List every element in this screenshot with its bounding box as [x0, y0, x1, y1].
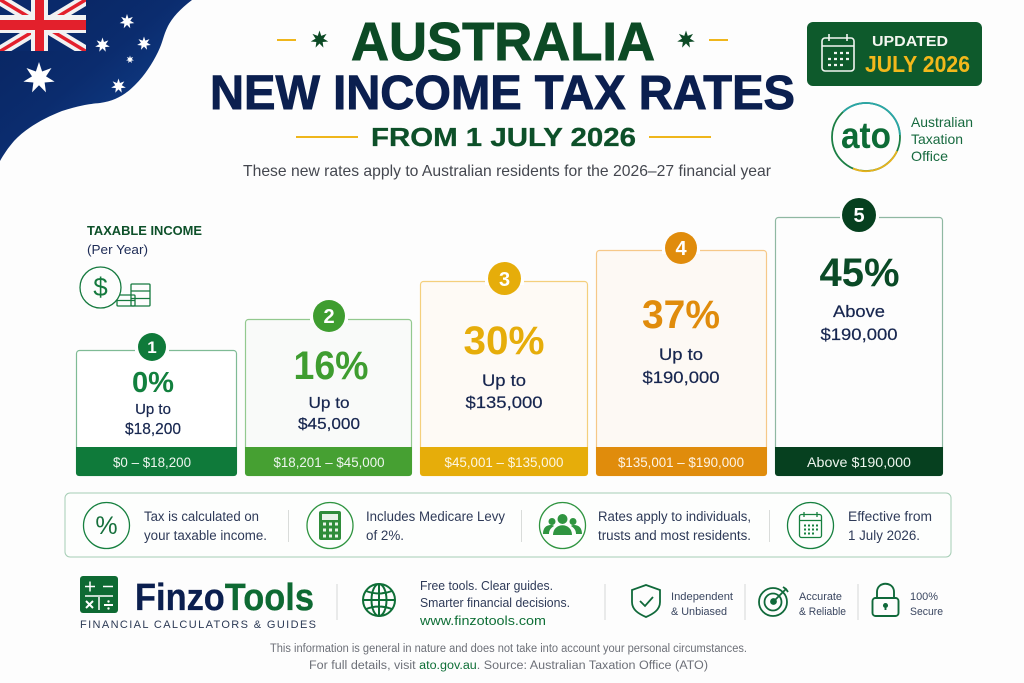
- icon: globe: [363, 584, 395, 616]
- promo text: Smarter financial decisions.: [420, 596, 570, 610]
- label: agency name: Office: [911, 148, 948, 164]
- threshold text: [125, 401, 181, 438]
- subtitle: These new rates apply to Australian residents for the 2026–27 financial year: [243, 163, 772, 180]
- label: agency name: [911, 114, 973, 164]
- badge text: Independent: [671, 591, 733, 603]
- disclaimer: This information is general in nature and does not take into account your personal circumstances.: [270, 643, 747, 655]
- number badge 1: [135, 333, 169, 361]
- note text: of 2%.: [366, 528, 404, 543]
- number badge 2: 2: [323, 306, 335, 328]
- number badge 2: [310, 300, 348, 332]
- badge text: & Reliable: [799, 606, 846, 618]
- note text: Rates apply to individuals,: [598, 509, 751, 524]
- note text: [144, 509, 267, 543]
- logo: FinzoTools: [80, 576, 316, 631]
- rate 16%: 16%: [294, 344, 368, 388]
- icon: Australian flag: [0, 0, 192, 161]
- panel: bracket 3: [420, 262, 588, 476]
- label: updated: UPDATED: [872, 33, 948, 50]
- range label: $45,001 – $135,000: [444, 454, 564, 470]
- number badge 5: [840, 198, 879, 232]
- threshold text: $190,000: [642, 368, 720, 387]
- number badge 5: 5: [853, 205, 865, 227]
- badge text: 100%: [910, 591, 938, 603]
- icon: shield: [632, 585, 660, 617]
- number badge 4: [662, 232, 700, 264]
- heading: new income tax rates: NEW INCOME TAX RATES: [210, 67, 795, 120]
- icon: calculator tile: [80, 576, 118, 613]
- number badge 3: [485, 262, 524, 295]
- rate 37%: 37%: [642, 293, 720, 337]
- threshold text: Up to: [308, 395, 350, 412]
- note: Medicare levy: [307, 502, 505, 548]
- threshold text: [298, 395, 360, 433]
- wordmark: ato: ato: [841, 115, 891, 156]
- website block: [363, 579, 570, 628]
- threshold text: Up to: [135, 401, 171, 418]
- note: effective date: [788, 502, 932, 548]
- note text: your taxable income.: [144, 528, 267, 543]
- label: July 2026: JULY 2026: [865, 51, 970, 77]
- rate 45%: 45%: [820, 251, 900, 295]
- note text: [848, 509, 932, 543]
- range label: $135,001 – $190,000: [618, 454, 744, 470]
- title block: [210, 12, 795, 180]
- range label: $0 – $18,200: [113, 454, 191, 470]
- icon: right star: [677, 30, 695, 48]
- icon: ato ring: [832, 103, 900, 171]
- note text: [598, 509, 751, 543]
- panel: key notes: [65, 493, 951, 557]
- threshold text: Above: [833, 302, 885, 321]
- panel: bracket 5: [775, 198, 943, 476]
- icon: dollar and coins: $: [93, 272, 108, 302]
- badge text: & Unbiased: [671, 606, 727, 618]
- note: taxable income: [84, 502, 267, 548]
- threshold text: $135,000: [466, 393, 542, 412]
- wordmark: FinzoTools: [135, 577, 314, 619]
- note text: Includes Medicare Levy: [366, 509, 505, 524]
- badge text: Secure: [910, 606, 943, 618]
- panel: bracket 1: [76, 333, 237, 476]
- disclaimer: [270, 643, 747, 672]
- range label: $18,201 – $45,000: [274, 454, 385, 470]
- threshold text: $45,000: [298, 416, 360, 433]
- taxable income label: [80, 224, 202, 308]
- number badge 1: 1: [147, 338, 157, 357]
- icon: calculator: [307, 502, 353, 548]
- icon: people: [540, 502, 586, 548]
- label: agency name: Australian: [911, 114, 973, 130]
- rate 30%: 30%: [464, 319, 544, 363]
- panel: bracket 4: [596, 232, 767, 476]
- promo text: [419, 579, 570, 628]
- note text: Tax is calculated on: [144, 509, 259, 524]
- note text: trusts and most residents.: [598, 528, 751, 543]
- heading: from 1 July 2026: FROM 1 JULY 2026: [371, 122, 636, 152]
- icon: padlock: [872, 584, 898, 616]
- note text: Effective from: [848, 509, 932, 524]
- heading: taxable income: TAXABLE INCOME: [87, 224, 202, 238]
- label: agency name: Taxation: [911, 131, 963, 147]
- badge text: Accurate: [799, 591, 842, 603]
- icon: left star: [311, 30, 328, 48]
- trust badge: secure: [872, 584, 943, 618]
- icon: calendar: [822, 34, 854, 71]
- badge text: [799, 591, 846, 618]
- icon: target: [759, 587, 788, 616]
- badge text: [671, 591, 733, 618]
- trust badge: independent: [632, 585, 733, 618]
- threshold text: $190,000: [820, 325, 898, 344]
- number badge 3: 3: [499, 269, 510, 291]
- range label: Above $190,000: [807, 454, 911, 470]
- number badge 4: 4: [675, 238, 687, 260]
- rate 0%: 0%: [132, 367, 174, 399]
- badge text: [910, 591, 943, 618]
- trust badge: accurate: [759, 587, 846, 618]
- threshold text: [820, 302, 898, 344]
- threshold text: [466, 371, 542, 412]
- heading: Australia: AUSTRALIA: [351, 12, 655, 72]
- icon: percent: %: [95, 512, 118, 540]
- note text: 1 July 2026.: [848, 528, 920, 543]
- disclaimer: For full details, visit ato.gov.au . Source: Australian Taxation Office (ATO): [309, 660, 708, 672]
- threshold text: Up to: [482, 371, 526, 390]
- threshold text: [642, 345, 720, 387]
- badge: updated July 2026: [807, 22, 982, 86]
- promo text: www.finzotools.com: [419, 614, 546, 628]
- panel: bracket 2: [245, 300, 412, 476]
- note text: [366, 509, 505, 543]
- promo text: Free tools. Clear guides.: [420, 579, 553, 593]
- logo: Australian Taxation Office: [832, 103, 973, 171]
- threshold text: Up to: [659, 345, 703, 364]
- note: who rates apply to: [540, 502, 751, 548]
- tagline: FINANCIAL CALCULATORS & GUIDES: [80, 619, 316, 631]
- caption: per year: (Per Year): [87, 242, 148, 257]
- threshold text: $18,200: [125, 421, 181, 438]
- icon: calendar: [788, 502, 834, 548]
- icon: percent: [84, 502, 130, 548]
